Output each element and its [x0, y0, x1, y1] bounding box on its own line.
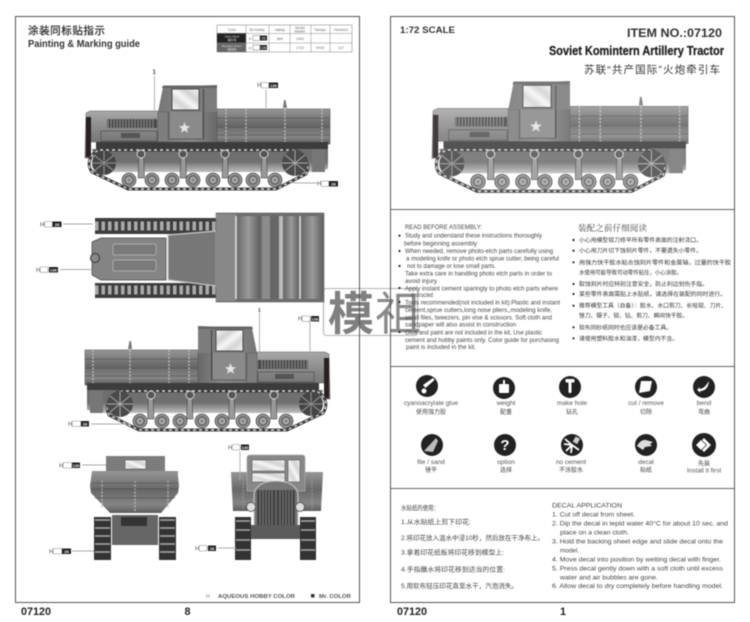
- text block: english assembly notes: not to damage or lose small parts.: [407, 263, 496, 270]
- text block: chinese assembly notes: 取蚀刻片时应特别注意安全，防止利边划伤手指。: [579, 280, 708, 288]
- callout: colour 28 rear view: H: [49, 550, 53, 556]
- heading: painting guide: Painting & Marking guide: [28, 39, 140, 50]
- text block: english decal instructions: DECAL APPLICATION: [552, 503, 622, 510]
- table: colour reference: -: [279, 46, 281, 50]
- callout: colour 136 front view: [228, 444, 249, 480]
- icon: install first: 先装: [698, 460, 710, 468]
- text block: chinese assembly notes: 请使用塑料胶水和油漆，模型内不含。: [579, 334, 678, 342]
- callout: colour 136 lower side view: H: [298, 316, 302, 322]
- heading: painting guide: [28, 24, 140, 50]
- callout: colour 136 rear view: 136: [73, 463, 80, 468]
- callout: colour 136 on bed: H: [257, 83, 261, 89]
- tractor top view: [90, 213, 324, 302]
- text block: english decal instructions: place on a clean cloth.: [560, 530, 629, 537]
- text block: chinese assembly notes: 水使用可能导致可动零件粘住，小心涂胶。: [579, 268, 682, 276]
- icon: no cement: [556, 434, 586, 474]
- icon: cut or remove: 切除: [640, 408, 652, 416]
- icon: weight: 配重: [500, 408, 512, 416]
- text block: english decal instructions: model.: [560, 547, 579, 554]
- text block: english assembly notes: cement,sprue cutters,long nose pliers,,modeling knife,: [405, 307, 552, 314]
- text block: english decal instructions: [552, 503, 728, 590]
- text block: english decal instructions: 6. Allow decal to dry completely before handling model.: [552, 583, 723, 590]
- table: colour reference: 烟灰色: [227, 37, 237, 42]
- callout: colour 28 top view: 28: [55, 222, 60, 227]
- watermark logo: 祖: [375, 288, 421, 340]
- icon: decal: [635, 434, 657, 474]
- table: colour reference: -: [340, 37, 342, 41]
- text block: chinese decal instructions: 5.用软布轻压印花直至水干，汽泡消失。: [401, 581, 518, 590]
- icon: decal: 贴纸: [640, 466, 652, 474]
- tractor side view, facing left: [85, 85, 330, 189]
- text block: english decal instructions: 1. Cut off decal from sheet.: [552, 512, 635, 519]
- heading: painting guide: 涂装同标贴指示: [28, 24, 105, 37]
- text block: english assembly notes: a modeling knife or photo etch sprue cutter, being careful: [406, 255, 559, 262]
- callout: part 1 on side view: 1: [152, 70, 156, 76]
- callout: colour 136 rear view: H: [59, 464, 63, 470]
- table: colour reference: 1710: [296, 46, 304, 50]
- panel: painting and marking guide: [16, 16, 360, 602]
- callout: colour 28 on track: H: [317, 182, 321, 188]
- page footer left: [21, 606, 191, 618]
- text block: chinese assembly notes: 推荐模型工具（自备）：胶水、水口剪刀、长咀钳、刀片、: [579, 302, 727, 310]
- text block: english assembly notes: Apply instant cement sparingly to photo etch parts where: [405, 285, 559, 292]
- text block: chinese decal instructions: 水贴纸的使用：: [401, 503, 439, 512]
- icon: file or sand: file / sand: [417, 459, 445, 466]
- table: colour reference: H: [249, 37, 252, 41]
- text block: english assembly notes: [398, 224, 560, 351]
- text block: english assembly notes: Glue and paint are not included in the kit. Use plastic: [405, 329, 542, 336]
- text block: chinese decal instructions: 1.从水贴纸上剪下印花:: [401, 517, 471, 526]
- text block: chinese decal instructions: 3.拿着印花纸板将印花移到模型上:: [401, 548, 504, 556]
- callout: colour 136 top view: 136: [50, 268, 58, 272]
- icon: option: ?: [500, 437, 510, 454]
- icon: file or sand: 锉平: [425, 466, 437, 474]
- tractor front view: [231, 455, 323, 560]
- text block: chinese assembly notes: 软布同砂纸同时也应该是必备工具。: [579, 323, 672, 331]
- callout: colour 28 front view: H: [195, 546, 199, 552]
- callout: colour 28 top view: [40, 222, 93, 228]
- callout: colour 28 rear view: [49, 548, 94, 556]
- callout: part 1 lower side view: [258, 308, 261, 352]
- table: colour reference: Vallejo: [275, 28, 285, 32]
- text block: english decal instructions: 4. Move decal into position by wetting decal with finger.: [552, 556, 721, 563]
- icon: file or sand: [417, 434, 445, 474]
- watermark logo: 模: [328, 288, 374, 340]
- table: colour reference: 俄绿色: [227, 46, 237, 52]
- callout: colour 28 rear view: 28: [64, 549, 69, 554]
- icon: decal: decal: [638, 459, 654, 466]
- page footer left: 07120: [21, 606, 51, 618]
- icon: option: option: [497, 459, 515, 466]
- callout: colour 136 top view: [36, 267, 92, 274]
- legend: paint brands: [206, 594, 351, 600]
- callout: colour 28 on track: 28: [331, 182, 336, 186]
- icon: install first: [687, 433, 721, 474]
- table: colour reference: 1402: [296, 37, 304, 41]
- legend: paint brands: AQUEOUS HOBBY COLOR: [218, 594, 295, 600]
- icon: install first: Install it first: [687, 468, 721, 474]
- callout: colour 28 lower side view: 28: [83, 422, 88, 426]
- text block: english assembly notes: Take extra care in handling photo etch parts in order to: [405, 271, 553, 278]
- callout: colour 136 rear view: [59, 462, 106, 470]
- icon: make hole: 钻孔: [566, 408, 578, 416]
- table: colour reference: Tamiya: [314, 28, 326, 32]
- callout: colour 136 top view: H: [36, 268, 40, 274]
- callout: part 1 lower side view: 1: [258, 308, 261, 314]
- table: colour reference: Mr.Hobby: [249, 28, 265, 32]
- callout: part 1 on side view: [152, 70, 156, 112]
- callout: colour 136 on bed: [257, 82, 278, 110]
- callout: colour 28 top view: H: [40, 222, 44, 228]
- divider lines: [391, 210, 734, 488]
- table: colour reference: Humbrol: [334, 28, 348, 32]
- text block: chinese decal instructions: 2.将印花放入温水中浸10秒，然后放在干净布上。: [401, 533, 544, 542]
- table: colour reference: -: [319, 37, 321, 41]
- table: colour reference: Haze Back: [225, 34, 240, 38]
- callout: colour 136 lower side view: [298, 316, 319, 354]
- heading: scale: 1:72 SCALE: [400, 25, 455, 35]
- page footer left: 8: [184, 606, 191, 618]
- text block: chinese assembly notes: 小心用模型钳刀修平所有零件表面的注射浇口。: [579, 236, 702, 244]
- icon: make hole: make hole: [557, 400, 587, 407]
- text block: chinese assembly notes: 锉刀、镊子、钳、钻、剪刀、瞬间快干胶。: [579, 312, 688, 320]
- text block: english decal instructions: 3. Hold the backing sheet edge and slide decal onto the: [552, 539, 724, 546]
- icon: weight: weight: [496, 400, 516, 407]
- table: colour reference: [217, 25, 352, 52]
- text block: english assembly notes: Tools recommended(not included in kit):Plastic and instant: [405, 299, 560, 306]
- icon: bend: [693, 376, 715, 416]
- callout: colour 28 lower side view: [68, 421, 130, 428]
- table: colour reference: 117: [338, 46, 344, 50]
- text block: english assembly notes: instructed: [411, 292, 433, 299]
- table: colour reference: 28: [262, 36, 266, 40]
- watermark logo: [324, 288, 421, 340]
- callout: colour 28 front view: [195, 546, 236, 552]
- text block: english assembly notes: Study and understand these instructions thoroughly: [405, 233, 543, 240]
- heading: product title: 苏联“共产国际”火炮牵引车: [584, 63, 720, 76]
- icon: cyanoacrylate glue: 使用强力胶: [416, 408, 446, 416]
- text block: english assembly notes: small files, tweezers, pin vise & scissors. Soft cloth and: [405, 314, 552, 321]
- icon: bend: 弯曲: [698, 408, 710, 416]
- text block: chinese assembly notes: 用强力快干胶水粘合蚀刻片零件和金属轴，过量的快干胶: [579, 258, 731, 266]
- product illustration: tractor: [432, 81, 688, 191]
- table: colour reference: Master: [295, 30, 306, 34]
- text block: english assembly notes: sandpaper will also assist in construction: [405, 322, 516, 329]
- table: colour reference: H: [249, 46, 252, 50]
- text block: english assembly notes: before beginning assembly: [404, 240, 478, 247]
- page footer right: 07120: [397, 606, 427, 618]
- heading: product title: ITEM NO.:07120: [627, 26, 722, 40]
- icon: option: 选择: [500, 466, 512, 474]
- callout: colour 136 front view: H: [228, 446, 232, 452]
- page footer right: [397, 606, 566, 618]
- icon: cyanoacrylate glue: [404, 375, 458, 416]
- heading: product title: [549, 26, 724, 76]
- text block: chinese assembly notes: 某些零件表面需贴上水贴纸，请选择在装配的同时进行。: [579, 290, 726, 298]
- icon: cut or remove: cut / remove: [628, 400, 664, 407]
- table: colour reference: Russian Green: [222, 44, 242, 48]
- icon: weight: [493, 377, 516, 416]
- page footer right: 1: [560, 606, 566, 618]
- icon: bend: bend: [697, 400, 712, 407]
- text block: english decal instructions: 5. Press decal gently down with a soft cloth until excess: [552, 565, 723, 572]
- callout: colour 28 front view: 28: [210, 546, 215, 551]
- table: colour reference: 136: [260, 46, 266, 50]
- callout: colour 136 front view: 136: [242, 445, 249, 450]
- table: colour reference: XF20: [316, 46, 324, 50]
- text block: english assembly notes: avoid injury: [405, 278, 438, 285]
- text block: chinese assembly notes: [572, 223, 731, 342]
- legend: paint brands: H: [206, 594, 210, 600]
- text block: english assembly notes: cement and hobby paints only. Color guide for purchasing: [405, 337, 559, 344]
- tractor side view, facing right: [85, 326, 330, 430]
- table: colour reference: 864: [277, 37, 283, 41]
- callout: colour 28 lower side view: H: [68, 422, 72, 428]
- text block: english assembly notes: paint is included in the kit.: [406, 344, 476, 351]
- icon: cyanoacrylate glue: cyanoacrylate glue: [404, 400, 458, 407]
- tractor rear view: [90, 456, 179, 560]
- callout: colour 28 on track: [293, 181, 338, 188]
- text block: english decal instructions: 2. Dip the decal in tepid water 40°C for about 10 sec. and: [552, 521, 728, 528]
- text block: chinese assembly notes: 小心用刀片切下蚀刻片零件，不要遗失小零件。: [579, 247, 702, 255]
- text block: chinese decal instructions: 4.手指蘸水将印花移到适当的位置:: [401, 564, 505, 574]
- text block: chinese assembly notes: 装配之前仔细阅读: [578, 223, 647, 233]
- icon: option: [494, 434, 516, 474]
- table: colour reference: Color: [228, 28, 237, 32]
- icon: make hole: [557, 376, 587, 416]
- icon: cut or remove: [628, 376, 664, 416]
- icon: no cement: no cement: [556, 459, 586, 466]
- text block: english assembly notes: When needed, remove photo-etch parts carefully using: [405, 248, 553, 255]
- legend: paint brands: Mr. COLOR: [319, 594, 351, 600]
- panel: product and instructions: [390, 16, 734, 602]
- text block: english assembly notes: READ BEFORE ASSEMBLY:: [405, 224, 482, 231]
- text block: chinese decal instructions: [401, 503, 544, 590]
- callout: colour 136 lower side view: 136: [312, 316, 319, 322]
- callout: colour 136 on bed: 136: [270, 83, 278, 88]
- icon: no cement: 不涂胶水: [559, 466, 583, 474]
- table: colour reference: Model: [295, 26, 305, 30]
- text block: english decal instructions: water and air bubbles are gone.: [559, 574, 658, 581]
